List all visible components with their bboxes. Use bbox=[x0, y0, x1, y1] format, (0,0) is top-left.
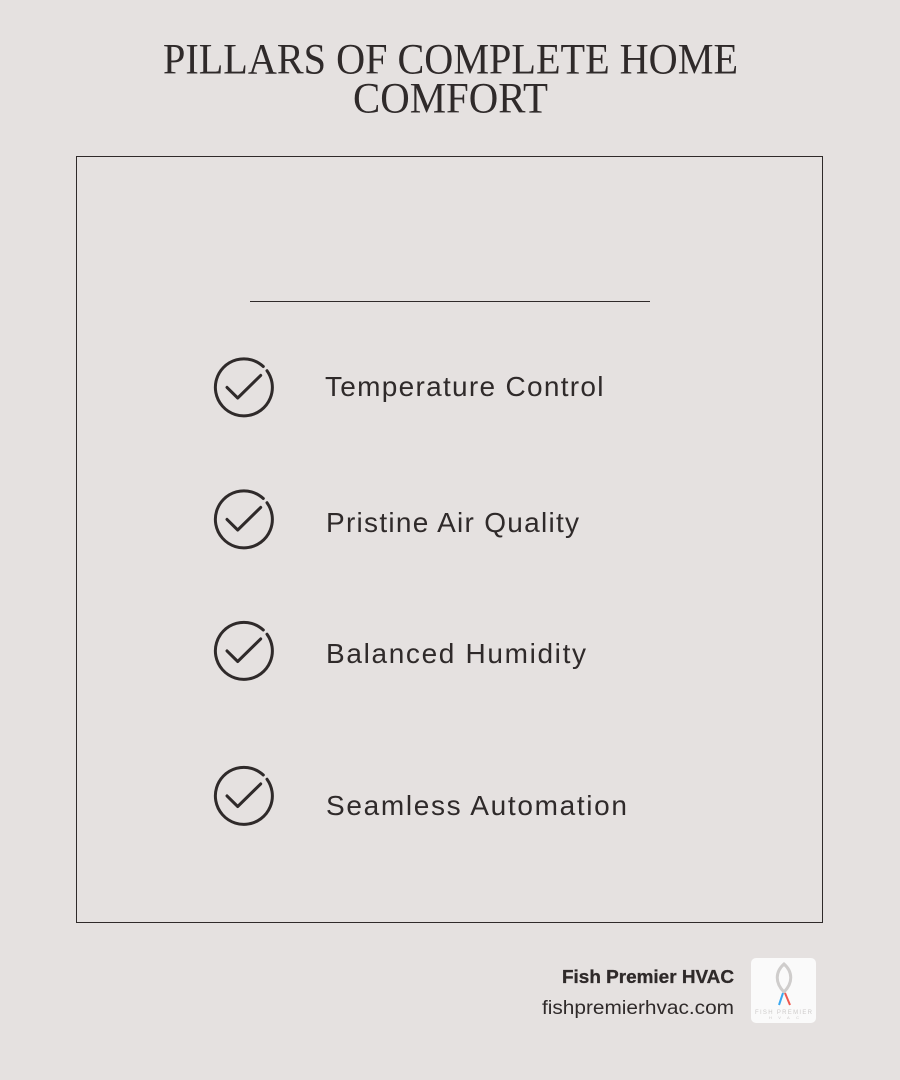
icon: check circle 1 bbox=[215, 359, 272, 416]
panel: pillars frame bbox=[76, 156, 822, 922]
brand name: Fish Premier HVAC bbox=[562, 967, 734, 987]
icon: check circle 2 bbox=[215, 491, 272, 548]
icon: brand logo: FISH PREMIER bbox=[755, 1010, 813, 1016]
label: seamless automation: Seamless Automation bbox=[326, 790, 627, 821]
title bbox=[163, 36, 738, 122]
label: balanced humidity: Balanced Humidity bbox=[326, 638, 586, 669]
icon: brand logo bbox=[751, 958, 816, 1023]
icon: brand logo: HVAC bbox=[769, 1015, 799, 1020]
label: pristine air quality: Pristine Air Quality bbox=[326, 507, 579, 538]
icon: check circle 3 bbox=[215, 622, 272, 679]
icon: check circle 4 bbox=[215, 767, 272, 824]
brand url: fishpremierhvac.com bbox=[542, 998, 734, 1019]
title: COMFORT bbox=[353, 76, 548, 122]
label: temperature control: Temperature Control bbox=[325, 371, 604, 402]
title: PILLARS OF COMPLETE HOME bbox=[163, 36, 738, 84]
